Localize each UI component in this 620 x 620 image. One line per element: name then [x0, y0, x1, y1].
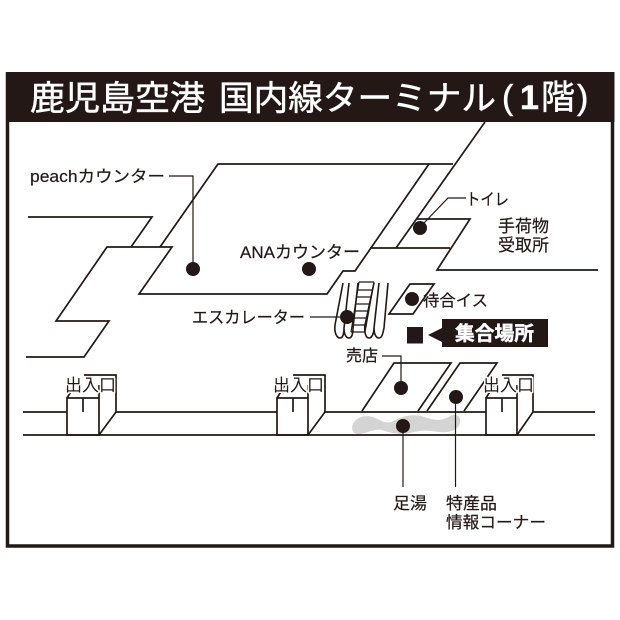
baggage claim wall: [370, 219, 598, 270]
floor plan outlines: [26, 122, 598, 357]
entrance 3: 出入口: [483, 376, 534, 395]
foot bath water: [352, 415, 460, 434]
specialty goods label: 特産品: [446, 494, 497, 513]
specialty goods label: 情報コーナー: [446, 513, 546, 532]
meeting place label: 集合場所: [455, 323, 534, 345]
label: waiting seats: 待合イス: [423, 292, 488, 310]
frame: [8, 74, 612, 546]
meeting place marker: [407, 319, 548, 347]
escalator label: エスカレーター: [192, 308, 305, 327]
escalator label: [192, 308, 354, 327]
title bar: [6, 72, 614, 122]
entrance 3: [483, 375, 534, 435]
ANA counter: [240, 243, 360, 276]
peach counter: [30, 167, 200, 276]
title: 階: [541, 79, 575, 117]
foot bath label: 足湯: [393, 494, 427, 513]
shop: [346, 347, 451, 411]
entrance 2: 出入口: [273, 376, 324, 395]
baggage claim label: 手荷物: [498, 217, 549, 236]
peach counter label: peachカウンター: [30, 167, 165, 186]
entrance 1: 出入口: [65, 376, 116, 395]
specialty goods corner: [427, 363, 546, 532]
foot bath: [393, 419, 427, 513]
title: ): [577, 79, 588, 117]
title: 1: [520, 79, 539, 117]
shop label: 売店: [346, 347, 378, 365]
corridor: [23, 412, 595, 435]
escalator: [335, 282, 388, 338]
toilet: [413, 191, 509, 235]
title: 国内線ターミナル: [219, 80, 496, 118]
toilet label: トイレ: [466, 191, 509, 209]
ANA counter label: ANAカウンター: [240, 243, 360, 262]
title: (: [502, 79, 514, 117]
left wall: [28, 217, 152, 247]
entrance 2: [273, 375, 325, 435]
baggage claim label: 受取所: [498, 236, 549, 255]
waiting seats: [389, 284, 488, 314]
entrance 1: [65, 375, 116, 435]
main counter hall: [26, 122, 485, 357]
title: 鹿児島空港: [30, 80, 205, 118]
